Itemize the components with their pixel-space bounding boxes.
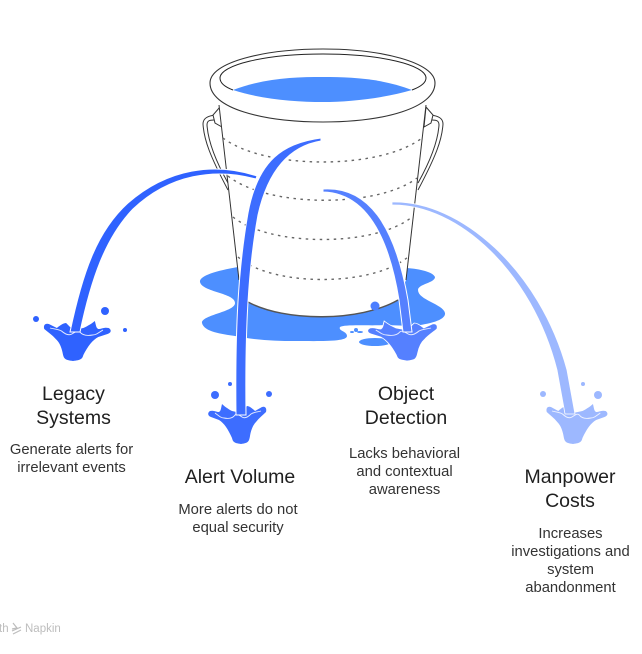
splash: manpower costs: [540, 382, 607, 444]
footer attribution: [0, 623, 61, 635]
heading: alert volume: Alert Volume: [185, 466, 295, 488]
text: object detection description: and contextual: [356, 464, 453, 480]
icon: napkin logo: [12, 623, 21, 634]
droplet on bucket: [370, 302, 380, 310]
footer attribution: Napkin: [25, 623, 61, 635]
text: object detection description: awareness: [369, 482, 440, 498]
heading: manpower costs: Manpower: [524, 466, 616, 488]
splash: alert volume: [208, 382, 272, 444]
puddle under bucket: [200, 267, 445, 346]
left handle: [203, 107, 228, 190]
bucket body: [219, 105, 426, 317]
text: alert volume description: More alerts do not: [178, 502, 298, 518]
heading: object detection: Object: [378, 383, 434, 405]
text: manpower costs description: investigations and: [511, 544, 630, 560]
text: object detection description: Lacks behavioral: [349, 446, 460, 462]
heading: legacy systems: Legacy: [42, 383, 105, 405]
text: manpower costs description: abandonment: [525, 580, 616, 596]
heading: manpower costs: Costs: [545, 490, 595, 512]
text: manpower costs description: system: [547, 562, 594, 578]
dashed rings: [223, 138, 422, 280]
splash: legacy systems: [33, 307, 127, 361]
splash: object detection: [368, 321, 437, 361]
right handle: [418, 107, 443, 190]
text: legacy systems description: Generate alerts for: [10, 442, 133, 458]
heading: legacy systems: Systems: [36, 407, 111, 429]
stream: legacy systems: [70, 169, 257, 332]
text: manpower costs description: Increases: [538, 526, 603, 542]
bucket: [203, 49, 443, 317]
text: legacy systems description: irrelevant events: [17, 460, 126, 476]
water surface: [233, 77, 412, 102]
stream: manpower costs: [392, 202, 575, 414]
stream: alert volume: [236, 138, 321, 415]
heading: object detection: Detection: [365, 407, 447, 429]
bucket rim: [210, 49, 435, 122]
stream: object detection: [323, 189, 412, 332]
text: alert volume description: equal security: [192, 520, 284, 536]
